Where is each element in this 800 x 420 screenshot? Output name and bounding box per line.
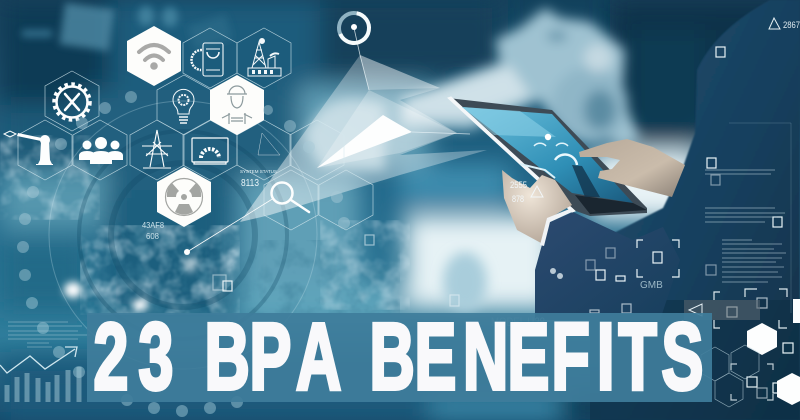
icon: target ring (337, 11, 371, 45)
machine speckle (0, 135, 410, 315)
title band (87, 304, 712, 410)
left hand (502, 170, 572, 243)
icon: laptop gear (192, 138, 228, 164)
hud labels: 2555 (510, 180, 527, 191)
white triangle (317, 115, 412, 168)
hud frame (729, 123, 791, 313)
dots on network (17, 91, 350, 281)
decorative right hexagons (684, 299, 800, 407)
hud labels: 8113 (241, 178, 259, 189)
robot arm (305, 8, 640, 312)
icon: group of people (79, 137, 123, 164)
shirt cuff (540, 208, 572, 246)
hud squares (213, 47, 793, 400)
hexagon network (4, 26, 373, 281)
bar and line chart (0, 297, 243, 417)
outline hexagons (18, 28, 373, 230)
hud micro text (8, 170, 786, 347)
icon: wifi hexagon (127, 26, 181, 86)
icon: oil rig (248, 38, 281, 76)
lower body shadow (590, 300, 800, 420)
hud labels: SYSTEM STATUS (240, 169, 277, 174)
hud labels (142, 18, 800, 329)
suit body (600, 0, 800, 420)
right hand (579, 139, 685, 197)
blurred windows (22, 3, 233, 51)
hud labels: 878 (512, 194, 524, 205)
sleeve (535, 212, 680, 320)
hud labels: MODEL U28 (491, 315, 545, 329)
hud labels: 43AF8 (142, 220, 164, 230)
concentric rings (49, 101, 317, 369)
icon: gear and tools (54, 84, 90, 120)
title: 23 BPA BENEFITS (94, 304, 703, 410)
finger shadow (572, 165, 600, 197)
icon: robot arm (4, 131, 53, 165)
man in suit (448, 0, 800, 420)
icon: power tower (142, 130, 172, 168)
large fan (240, 55, 487, 222)
translucent data fan (240, 28, 487, 222)
tablet (448, 97, 647, 216)
icon: radiation hexagon (157, 167, 211, 227)
hud labels: GMB (640, 280, 663, 291)
suit buttons (550, 268, 563, 279)
icon: engineer hexagon (210, 75, 264, 135)
hud labels: 608 (146, 231, 159, 241)
grey data strip (684, 300, 760, 320)
icon: magnifier with node line (184, 133, 309, 255)
icon: light bulb with gear (173, 89, 194, 123)
icon: tablet with gear (191, 43, 223, 76)
